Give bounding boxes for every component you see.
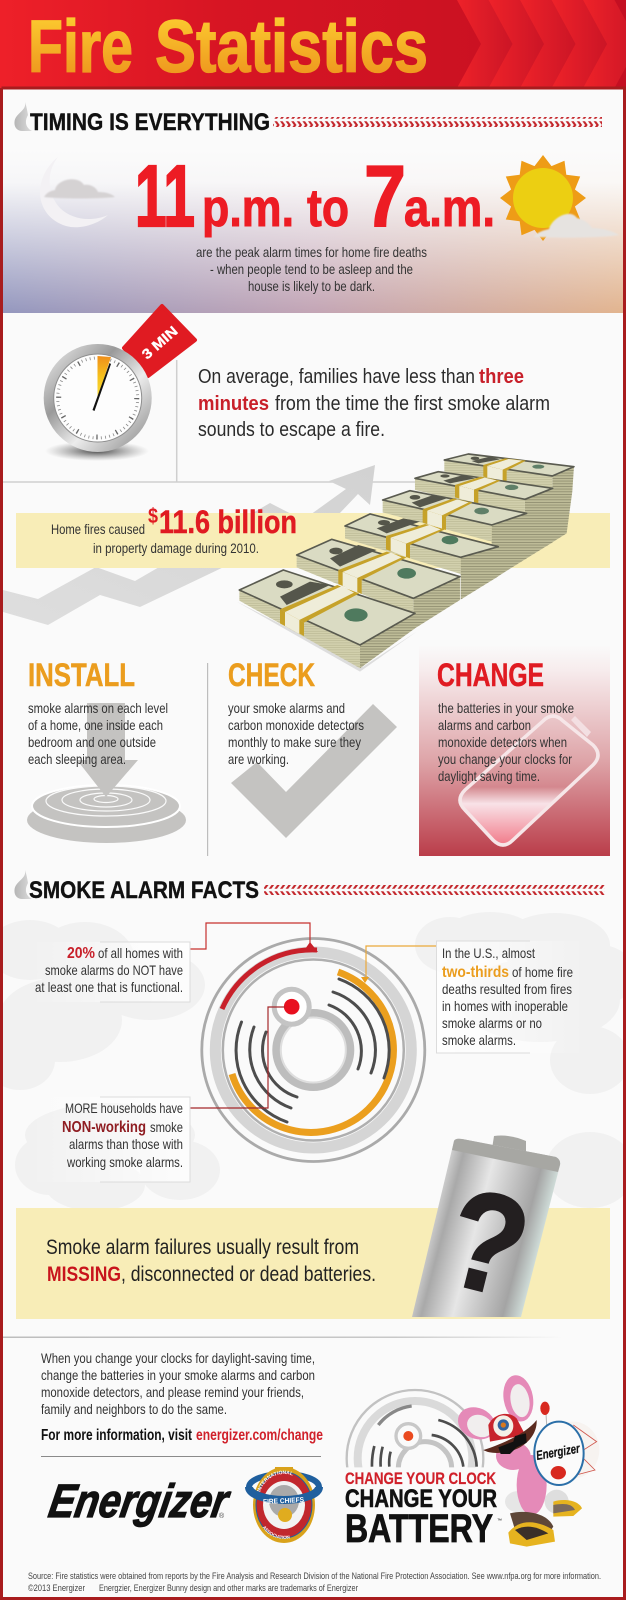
text: more information link: For more information, visit: [41, 1427, 193, 1444]
callout: non-working: [30, 1097, 190, 1182]
highlight band: [16, 513, 610, 568]
heading: timing is everything: TIMING IS EVERYTHING: [30, 109, 270, 136]
panel: change: [419, 645, 610, 856]
logo: change your clock change your battery: CHANGE YOUR CLOCK: [345, 1469, 497, 1488]
icon: stopwatch with 3 MIN tag: 3 MIN: [138, 323, 181, 362]
text: install: each sleeping area.: [28, 751, 126, 767]
dark sound arcs: [236, 979, 389, 1122]
source note: Energzier, Energizer Bunny design and other marks are trademarks of Energizer: [99, 1583, 358, 1594]
callout: non-working: smoke: [150, 1119, 183, 1135]
logo: change your clock change your battery: CHANGE YOUR: [345, 1485, 497, 1513]
text: 11.6 billion: 11.6 billion: [159, 504, 297, 540]
smoke clouds background: [0, 912, 626, 1211]
callout: two thirds: in homes with inoperable: [442, 998, 568, 1014]
text: 11.6 billion: [51, 504, 297, 556]
text: change: the batteries in your smoke: [438, 700, 574, 716]
tail and belly: [545, 1490, 569, 1514]
logo: change your clock change your battery: ™: [497, 1518, 502, 1524]
text: three minutes: [198, 366, 550, 441]
logo: Energizer: Energizer: [45, 1475, 234, 1528]
text: peak alarm times: [196, 244, 427, 294]
text: check: your smoke alarms and: [228, 700, 345, 716]
header banner: [0, 0, 626, 88]
callout: two thirds: [436, 941, 586, 1053]
text: check: monthly to make sure they: [228, 734, 361, 750]
text: 11.6 billion: $: [148, 505, 158, 528]
logo: fire chiefs association: ASSOCIATION: [262, 1526, 290, 1539]
panel: install: [27, 657, 186, 843]
icon: stopwatch with 3 MIN tag: [44, 306, 195, 461]
logo: change your clock change your battery: [345, 1390, 502, 1551]
text: battery failures: MISSING: [47, 1263, 121, 1286]
arrow: rising grey zigzag: [3, 465, 375, 625]
text: peak alarm times: - when people tend to be asleep and the: [210, 261, 413, 277]
text: install: [28, 700, 168, 767]
text: install: of a home, one inside each: [28, 717, 163, 733]
icon: pink bunny with drum: Energizer: [535, 1440, 582, 1463]
text: three minutes: three: [479, 366, 524, 388]
big time: 11 p.m. to 7 a.m.: to: [307, 179, 349, 238]
text: change your clocks paragraph: [41, 1350, 315, 1417]
logo: Energizer: ®: [219, 1512, 225, 1520]
text: peak alarm times: house is likely to be dark.: [248, 278, 375, 294]
big time: 11 p.m. to 7 a.m.: a.m.: [404, 179, 495, 238]
mallet top: [546, 1413, 547, 1435]
icon: staircase of money stacks: [237, 454, 574, 672]
big time: 11 p.m. to 7 a.m.: p.m.: [202, 179, 294, 238]
title: Fire: [28, 5, 133, 88]
callout: non-working: MORE households have: [65, 1100, 183, 1116]
pants and boot: [510, 1512, 553, 1537]
heading: install: INSTALL: [28, 657, 135, 693]
callout: two thirds: two-thirds: [442, 964, 509, 981]
big time: 11 p.m. to 7 a.m.: 7: [364, 148, 406, 245]
callout: two thirds: smoke alarms.: [442, 1032, 516, 1048]
text: three minutes: minutes: [198, 393, 269, 415]
divider above footer: [3, 1336, 563, 1338]
heading: change: CHANGE: [437, 657, 544, 693]
helmet: [488, 1414, 525, 1442]
icon: pink bunny with drum: [453, 1373, 599, 1547]
arc: orange two thirds: [232, 972, 393, 1132]
text: install: smoke alarms on each level: [28, 700, 168, 716]
divider between install and check: [207, 663, 208, 856]
text: check: [228, 700, 364, 767]
heading: smoke alarm facts: [14, 870, 605, 904]
title: Statistics: [155, 5, 428, 88]
arc: red 20 percent: [222, 950, 317, 1009]
big time: 11 p.m. to 7 a.m.: [135, 148, 495, 245]
icon: battery with question mark: ?: [432, 1157, 543, 1328]
icon: low battery outline: [460, 716, 598, 845]
text: check: are working.: [228, 751, 289, 767]
drum: [547, 1422, 599, 1478]
icon: moon with cloud: [40, 157, 115, 227]
text: change: you change your clocks for: [438, 751, 572, 767]
icon: check mark: [231, 704, 397, 838]
text: change: daylight saving time.: [438, 768, 540, 784]
text: battery failures: [46, 1236, 376, 1286]
hat brim: [483, 1420, 537, 1453]
panel: check: [228, 657, 397, 838]
text: check: carbon monoxide detectors: [228, 717, 364, 733]
body: [517, 1455, 547, 1515]
callout: 20 percent: at least one that is functional.: [35, 979, 183, 995]
callout: two thirds: smoke alarms or no: [442, 1015, 542, 1031]
text: change your clocks paragraph: When you change your clocks for daylight-saving time,: [41, 1350, 315, 1366]
heading: check: CHECK: [228, 657, 315, 693]
logo: fire chiefs association: INTERNATIONAL: [257, 1470, 292, 1492]
callout: two thirds: In the U.S., almost: [442, 945, 535, 961]
callout: 20 percent: 20%: [67, 945, 95, 962]
source note: [28, 1571, 601, 1594]
text: change your clocks paragraph: family and neighbors to do the same.: [41, 1401, 227, 1417]
text: battery failures: , disconnected or dead batteries.: [121, 1263, 376, 1286]
heading: timing is everything: [14, 102, 602, 136]
callout: non-working: alarms than those with: [69, 1136, 183, 1152]
second boot: [553, 1500, 582, 1517]
divider above logos: [41, 1456, 321, 1457]
alarm red indicator light: [274, 989, 309, 1024]
callout: non-working: working smoke alarms.: [66, 1154, 183, 1170]
callout: 20 percent: smoke alarms do NOT have: [45, 962, 183, 978]
text: three minutes: from the time the first smoke alarm: [275, 393, 550, 415]
divider lines: [3, 360, 420, 482]
text: install: bedroom and one outside: [28, 734, 156, 750]
heading: smoke alarm facts: SMOKE ALARM FACTS: [29, 877, 259, 904]
callout: 20 percent: of all homes with: [98, 945, 183, 961]
icon: small smoke alarm: [346, 1388, 484, 1468]
text: change: monoxide detectors when: [438, 734, 567, 750]
text: 11.6 billion: in property damage during 2010.: [93, 540, 259, 556]
big time: 11 p.m. to 7 a.m.: 11: [135, 148, 195, 245]
text: battery failures: Smoke alarm failures usually result from: [46, 1236, 359, 1259]
sunglasses: [498, 1433, 527, 1454]
panel: property damage: [3, 454, 610, 672]
panel: three minutes: [3, 306, 550, 482]
text: change: [438, 700, 574, 784]
chart: smoke alarm diagram: [190, 923, 436, 1162]
text: change your clocks paragraph: monoxide detectors, and please remind your friends,: [41, 1384, 304, 1400]
panel: battery failures: [16, 1136, 610, 1328]
leader lines: [190, 923, 436, 1108]
logo: fire chiefs association: [245, 1467, 323, 1543]
text: three minutes: On average, families have less than: [198, 366, 475, 388]
callout: two thirds: of home fire: [512, 964, 573, 980]
callout: non-working: NON-working: [62, 1119, 146, 1136]
text: three minutes: sounds to escape a fire.: [198, 419, 385, 441]
callout: 20 percent: [30, 942, 190, 1002]
text: change your clocks paragraph: change the batteries in your smoke alarms and carbon: [41, 1367, 315, 1383]
logo: fire chiefs association: FIRE CHIEFS: [263, 1497, 305, 1506]
ears: [500, 1373, 537, 1424]
text: change: alarms and carbon: [438, 717, 531, 733]
icon: target with arrow: [27, 703, 186, 843]
text: 11.6 billion: Home fires caused: [51, 521, 145, 537]
text: more information link: energizer.com/change: [196, 1427, 323, 1444]
callout: two thirds: deaths resulted from fires: [442, 981, 572, 997]
text: peak alarm times: are the peak alarm times for home fire deaths: [196, 244, 427, 260]
icon: sun with cloud: [500, 155, 619, 241]
title: [28, 5, 428, 88]
source note: ©2013 Energizer: [28, 1583, 85, 1594]
logo: change your clock change your battery: BATTERY: [345, 1507, 493, 1551]
panel: timing gradient background: [3, 150, 623, 313]
